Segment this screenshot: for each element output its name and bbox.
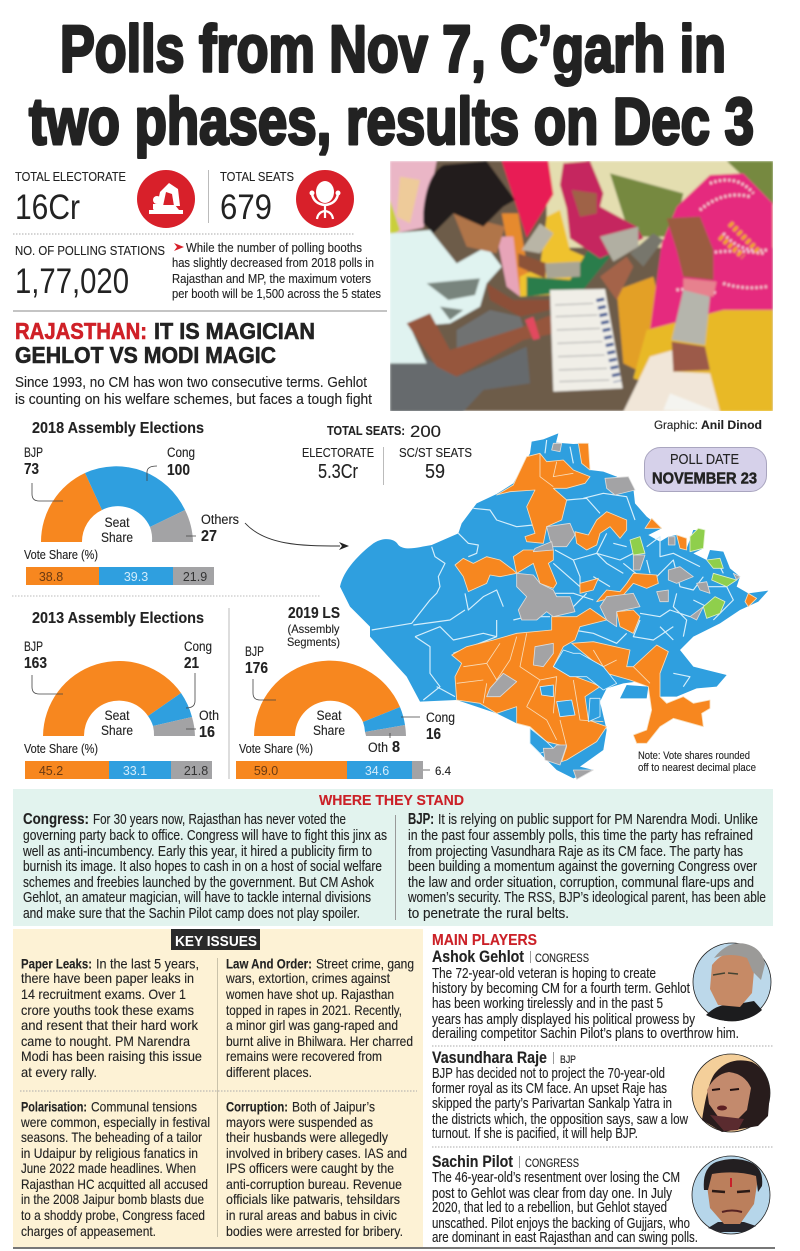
player: Sachin Pilot: CONGRESS — [525, 1156, 579, 1170]
text: Congress: schemes and freebies launched by the government. But CM Ashok — [23, 875, 375, 891]
player: Vasundhara Raje: former royal as its CM face. An upset Raje has — [432, 1081, 667, 1097]
text: law and order: Street crime, gang — [316, 956, 414, 972]
player: Sachin Pilot: are dominant in east Rajasthan and can swing polls. — [432, 1230, 698, 1246]
player: Sachin Pilot: 2020, that led to a rebellion, but Gehlot stayed — [432, 1200, 667, 1216]
player: Ashok Gehlot: CONGRESS — [535, 951, 589, 965]
player: Vasundhara Raje: BJP has decided not to project the 70-year-old — [432, 1066, 665, 1082]
portrait: Vasundhara Raje — [692, 1054, 770, 1132]
right woman — [650, 173, 773, 330]
text: polarisation — [20, 1099, 210, 1239]
note: polling booths: Rajasthan and MP, the maximum voters — [172, 272, 371, 286]
text: paper leaks: Modi has been raising this issue — [21, 1048, 202, 1064]
callout: poll date: NOVEMBER 23 — [652, 470, 757, 488]
heading: Rajasthan: GEHLOT VS MODI MAGIC — [15, 342, 276, 368]
note: polling booths — [172, 241, 381, 301]
arrow: chart to map — [245, 523, 349, 550]
stat: total seats: 679 — [220, 188, 272, 227]
chart: 2013 assembly elections: Cong — [184, 639, 212, 654]
stats: Rajasthan totals — [302, 422, 472, 485]
chart: 2019 LS assembly segments: 8 — [392, 739, 400, 756]
callout: poll date: POLL DATE — [670, 451, 739, 468]
chart: 2018 assembly elections: 39.3 — [124, 570, 148, 584]
text: Congress — [22, 811, 387, 922]
stats: Rajasthan totals: 59 — [425, 461, 445, 483]
player: Sachin Pilot: unscathed. Pilot enjoys the backing of Gujjars, who — [432, 1216, 690, 1232]
text: corruption: their husbands were allegedly — [226, 1129, 388, 1145]
player: Sachin Pilot: The 46-year-old’s resentment over losing the CM — [432, 1170, 680, 1186]
text: corruption — [226, 1099, 407, 1239]
note: polling booths: per booth will be 1,500 across the 5 states — [172, 287, 381, 301]
chart: 2019 LS assembly segments: Segments) — [287, 635, 340, 649]
text: corruption: mayors were suspended as — [226, 1114, 373, 1130]
text: polarisation: in Udaipur by religious fanatics in — [21, 1145, 198, 1161]
text: law and order: wars, extortion, crimes against — [225, 970, 390, 986]
player: Ashok Gehlot: history by becoming CM for a fourth term. Gehlot — [432, 981, 690, 997]
player: Sachin Pilot: post to Gehlot was clear from day one. In July — [432, 1186, 673, 1202]
text: polarisation: Communal tensions — [91, 1099, 197, 1115]
chart: 2013 assembly elections — [24, 610, 219, 779]
text: BJP: to penetrate the rural belts. — [408, 906, 569, 922]
text: polarisation: Rajasthan HC acquitted all accused — [21, 1176, 208, 1192]
chart: 2018 assembly elections: Vote Share (%) — [24, 548, 98, 562]
stats: Rajasthan totals: SC/ST SEATS — [399, 446, 472, 460]
player: Sachin Pilot — [432, 1153, 698, 1246]
stat: total seats: TOTAL SEATS — [220, 170, 294, 184]
icon: voter at ballot — [137, 170, 195, 228]
text: BJP — [407, 811, 766, 922]
stat: polling stations: 1,77,020 — [15, 262, 129, 301]
text: corruption: involved in bribery cases. IAS and — [226, 1145, 407, 1161]
chart: 2019 LS assembly segments: 176 — [245, 660, 268, 677]
EVM — [550, 289, 623, 392]
photo: voter with EVM — [390, 161, 773, 412]
man — [390, 347, 530, 412]
chart: 2018 assembly elections: 2018 Assembly Elections — [32, 420, 204, 437]
text: BJP: from projecting Vasundhara Raje as its CM face. The party has — [408, 844, 743, 860]
portrait: Ashok Gehlot — [693, 943, 771, 1021]
text: polarisation: charges of appeasement. — [21, 1223, 156, 1239]
chart: 2019 LS assembly segments: 16 — [426, 726, 441, 743]
panel: main players — [432, 932, 773, 1246]
chart: 2013 assembly elections: Oth — [199, 708, 219, 723]
chart: 2013 assembly elections: 21 — [184, 655, 199, 672]
chart: 2013 assembly elections: Vote Share (%) — [24, 742, 98, 756]
chart: 2013 assembly elections: 16 — [199, 724, 215, 741]
text: polarisation: seasons. The beheading of a tailor — [21, 1129, 202, 1145]
chart: 2018 assembly elections: 27 — [201, 528, 217, 545]
text: law and order: burnt alive in Bhilwara. Her charred — [226, 1033, 413, 1049]
note: polling booths: has slightly decreased from 2018 polls in — [172, 256, 374, 270]
player: Vasundhara Raje: skipped the party’s Parivartan Sankalp Yatra in — [432, 1096, 672, 1112]
chart: 2019 LS assembly segments: (Assembly — [288, 622, 340, 636]
text: paper leaks: In the last 5 years, — [96, 956, 199, 972]
text: polarisation: were common, especially in festival — [20, 1114, 210, 1130]
stat: total electorate: TOTAL ELECTORATE — [15, 170, 126, 184]
chart: 2019 LS assembly segments: Vote Share (%) — [239, 742, 313, 756]
text: Congress: well as anti-incumbency. Early this year, it hired a publicity firm to — [22, 844, 372, 860]
text: Congress: governing party back to office. Congress will have to fight this jinx as — [23, 828, 387, 844]
icon: chair — [296, 170, 354, 228]
stats: Rajasthan totals: ELECTORATE — [302, 446, 374, 460]
credit — [654, 418, 762, 432]
portrait: Sachin Pilot — [692, 1156, 770, 1234]
text: corruption: officials like patwaris, tehsildars — [226, 1191, 400, 1207]
stats: Rajasthan totals: TOTAL SEATS: — [327, 424, 405, 438]
chart: 2018 assembly elections: Seat — [104, 514, 130, 530]
chart: 2018 assembly elections: 38.8 — [39, 570, 63, 584]
text: corruption: in rural areas and babus in civic — [226, 1207, 397, 1223]
text: law and order: Law And Order: — [226, 956, 312, 972]
text: law and order: a minor girl was gang-raped and — [226, 1017, 398, 1033]
note: polling booths: While the number of polling booths — [186, 241, 362, 255]
map note: Note: Vote shares rounded — [638, 750, 750, 762]
stat: total electorate: 16Cr — [15, 188, 80, 227]
player: Vasundhara Raje — [432, 1049, 688, 1142]
chart: 2018 assembly elections: 73 — [24, 461, 39, 478]
heading: Rajasthan: RAJASTHAN: — [15, 318, 147, 344]
credit: Graphic: — [654, 418, 698, 432]
player: Vasundhara Raje: Vasundhara Raje — [432, 1049, 547, 1067]
text: BJP: BJP: — [408, 811, 434, 828]
chart: 2018 assembly elections: Cong — [167, 445, 195, 460]
text: paper leaks: came to nought. PM Narendra — [21, 1033, 190, 1049]
player: Vasundhara Raje: the districts which, the opposition says, saw a low — [432, 1112, 688, 1128]
player: Ashok Gehlot: has been working tirelessly and in the past 5 — [432, 996, 663, 1012]
chart: 2018 assembly elections: Share — [101, 529, 133, 545]
chart: 2018 assembly elections: BJP — [24, 445, 43, 460]
center woman — [520, 210, 593, 297]
text: corruption: Corruption: — [226, 1099, 288, 1115]
panel: where they stand — [13, 789, 773, 926]
player: Vasundhara Raje: BJP — [560, 1054, 576, 1066]
map: Rajasthan constituencies — [340, 433, 768, 779]
player: Ashok Gehlot: derailing competitor Sachin Pilot’s plans to overthrow him. — [432, 1026, 739, 1042]
chart: 2019 LS assembly segments: BJP — [245, 644, 264, 659]
stat: total seats — [220, 170, 294, 227]
chart: 2018 assembly elections: Others — [201, 512, 239, 527]
text: Congress: For 30 years now, Rajasthan has never voted the — [93, 812, 346, 828]
panel: key issues: KEY ISSUES — [175, 933, 257, 950]
player: Sachin Pilot: Sachin Pilot — [432, 1153, 513, 1171]
chart: 2019 LS assembly segments: Oth — [368, 740, 388, 755]
credit: Anil Dinod — [701, 418, 762, 432]
text: corruption: anti-corruption bureau. Revenue — [226, 1176, 402, 1192]
chart: 2019 LS assembly segments: 59.0 — [254, 764, 278, 778]
text: paper leaks: 14 recruitment exams. Over 1 — [21, 986, 186, 1002]
intro text: is counting on his welfare schemes, but faces a tough fight — [15, 391, 373, 408]
text: paper leaks — [21, 956, 202, 1080]
text: law and order: topped in rapes in 2021. Recently, — [226, 1002, 402, 1018]
chart: 2018 assembly elections — [24, 420, 239, 585]
text: paper leaks: crore youths took these exams — [21, 1002, 194, 1018]
panel: key issues — [13, 929, 423, 1247]
chart: 2013 assembly elections: 33.1 — [123, 764, 147, 778]
panel: main players: MAIN PLAYERS — [432, 932, 537, 949]
text: corruption: bodies were arrested for bribery. — [226, 1223, 403, 1239]
text: Congress: Gehlot, an amateur magician, will have to tackle internal divisions — [23, 890, 371, 906]
title — [29, 12, 754, 158]
chart: 2019 LS assembly segments: Cong — [426, 710, 455, 725]
chart: 2018 assembly elections: 21.9 — [183, 570, 207, 584]
text: law and order: women have shot up. Rajasthan — [225, 986, 394, 1002]
chart: 2019 LS assembly segments: Share — [313, 722, 345, 738]
heading: Rajasthan: IT IS MAGICIAN — [154, 318, 315, 344]
chart: 2019 LS assembly segments: 34.6 — [365, 764, 389, 778]
chart: 2013 assembly elections: Seat — [104, 707, 130, 723]
text: Congress: Congress: — [23, 811, 89, 828]
text: Congress: and make sure that the Sachin Pilot camp does not play spoiler. — [23, 906, 360, 922]
chart: 2013 assembly elections: 2013 Assembly Elections — [32, 610, 204, 627]
map note — [638, 750, 756, 774]
text: paper leaks: and resent that their hard work — [21, 1017, 199, 1033]
player: Ashok Gehlot: Ashok Gehlot — [432, 948, 524, 966]
text: paper leaks: at every rally. — [21, 1064, 97, 1080]
text: paper leaks: Paper Leaks: — [21, 956, 92, 972]
heading: Rajasthan — [15, 318, 315, 368]
chart: 2019 LS assembly segments: Seat — [316, 707, 342, 723]
callout: poll date — [644, 448, 766, 492]
chart: 2013 assembly elections: Share — [101, 722, 133, 738]
chart: 2018 assembly elections: 100 — [167, 462, 190, 479]
chart: 2019 LS assembly segments: 2019 LS — [288, 605, 340, 622]
text: polarisation: to a shoddy probe, Congress faced — [21, 1207, 205, 1223]
map note: off to nearest decimal place — [638, 762, 756, 774]
intro text — [15, 374, 373, 408]
player: Vasundhara Raje: turnout. If she is pacified, it will help BJP. — [432, 1126, 638, 1142]
text: Congress: burnish its image. It also hopes to cash in on a host of social welfare — [23, 859, 382, 875]
intro text: Since 1993, no CM has won two consecutive terms. Gehlot — [15, 374, 368, 391]
stats: Rajasthan totals: 5.3Cr — [318, 461, 358, 483]
text: polarisation: June 2022 made headlines. When — [21, 1160, 196, 1176]
text: polarisation: in the 2008 Jaipur bomb blasts due — [21, 1191, 204, 1207]
text: paper leaks: there have been paper leaks in — [21, 970, 194, 986]
text: law and order: remains were recovered from — [226, 1048, 382, 1064]
text: polarisation: Polarisation: — [21, 1099, 87, 1115]
panel: where they stand: WHERE THEY STAND — [319, 792, 464, 809]
player: Ashok Gehlot: The 72-year-old veteran is hoping to create — [432, 966, 656, 982]
chart: 2019 LS assembly segments — [236, 605, 455, 779]
stat: total electorate — [15, 170, 126, 227]
stat: polling stations — [15, 244, 165, 301]
text: corruption: IPS officers were caught by the — [226, 1160, 394, 1176]
stat: polling stations: NO. OF POLLING STATIONS — [15, 244, 165, 258]
chart: 2013 assembly elections: BJP — [24, 639, 43, 654]
player: Ashok Gehlot — [432, 948, 739, 1042]
stats: Rajasthan totals: 200 — [410, 422, 441, 441]
chart: 2019 LS assembly segments: 6.4 — [435, 764, 451, 778]
chart: 2013 assembly elections: 21.8 — [184, 764, 208, 778]
text: law and order — [225, 956, 414, 1080]
chart: 2013 assembly elections: 163 — [24, 655, 47, 672]
chart: 2013 assembly elections: 45.2 — [39, 764, 63, 778]
text: corruption: Both of Jaipur’s — [292, 1099, 375, 1115]
player: Ashok Gehlot: years has amply displayed his political prowess by — [432, 1012, 696, 1028]
text: law and order: different places. — [226, 1064, 312, 1080]
